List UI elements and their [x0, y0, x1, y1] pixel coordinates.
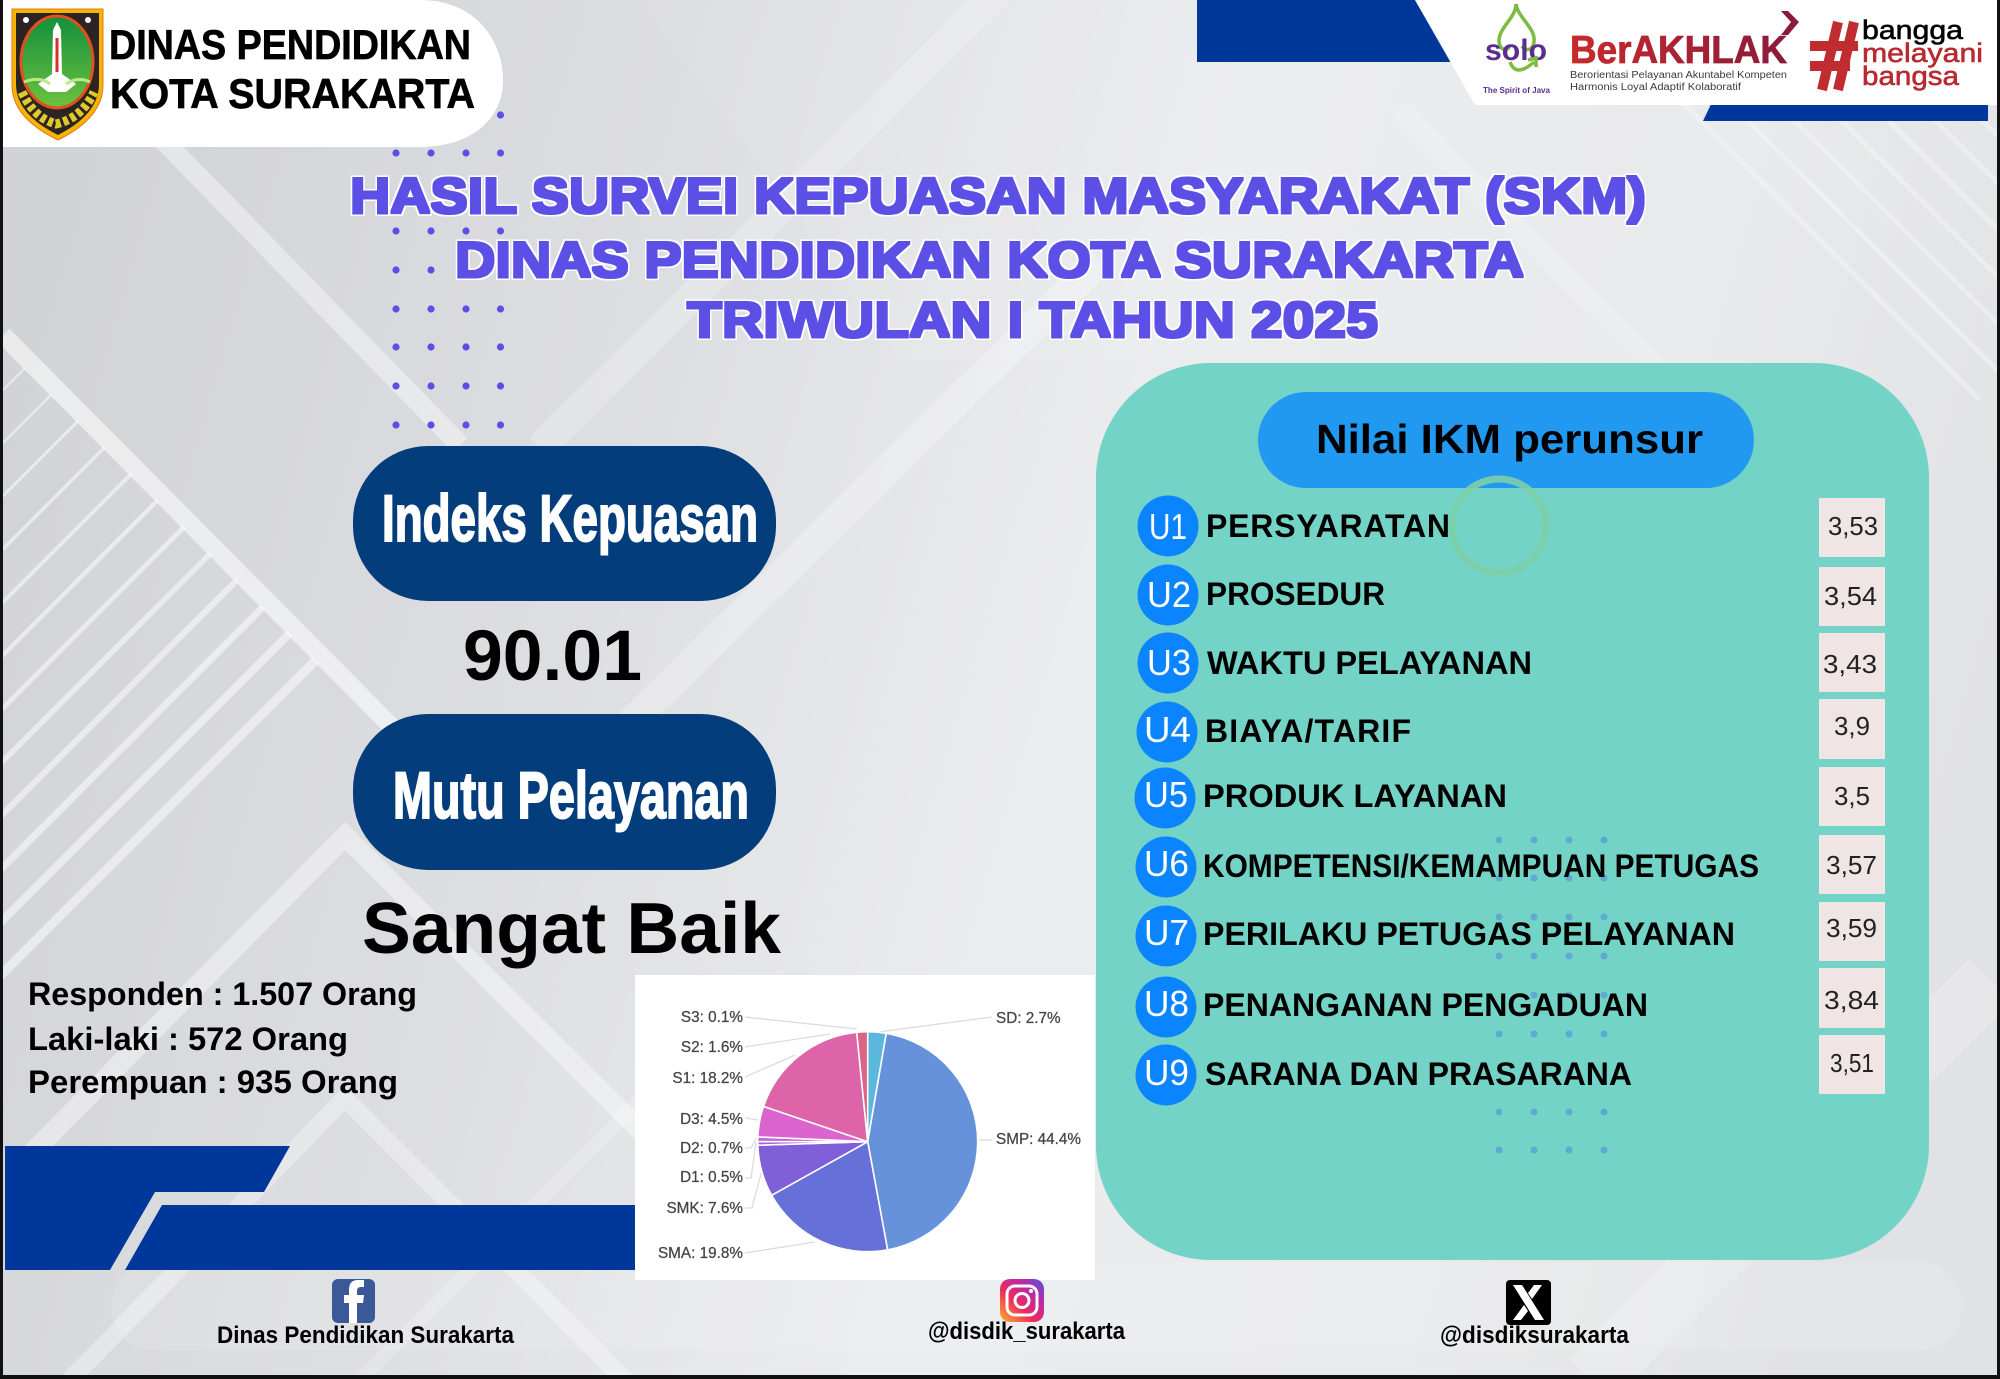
- icon: Solo logo: [1483, 4, 1551, 95]
- row U2: [1138, 564, 1885, 626]
- row U1: U1: [1149, 506, 1187, 547]
- pie slices: [758, 1032, 978, 1252]
- row U5: PRODUK LAYANAN: [1203, 778, 1507, 814]
- logo: BerAKHLAK: BerAKHLAK: [1570, 29, 1787, 72]
- pill: Mutu Pelayanan: Mutu Pelayanan: [393, 758, 749, 832]
- row U3: U3: [1147, 642, 1191, 683]
- logo: BerAKHLAK: Harmonis Loyal Adaptif Kolaboratif: [1570, 82, 1741, 93]
- row U8: 3,84: [1824, 985, 1879, 1015]
- row U8: U8: [1144, 983, 1189, 1024]
- row U4: U4: [1144, 709, 1191, 750]
- row U6: 3,57: [1826, 850, 1877, 880]
- pie labels: S3: 0.1%: [681, 1009, 743, 1026]
- row U7: U7: [1144, 912, 1189, 953]
- pie labels: D1: 0.5%: [680, 1169, 743, 1186]
- pie labels: SD: 2.7%: [996, 1010, 1061, 1027]
- footer: Facebook: Dinas Pendidikan Surakarta: [217, 1322, 515, 1349]
- footer pill: [112, 1262, 1962, 1350]
- header title: KOTA SURAKARTA: [110, 70, 475, 117]
- row U6: [1136, 835, 1885, 898]
- slogan: melayani: [1862, 38, 1983, 68]
- row U2: PROSEDUR: [1206, 576, 1385, 612]
- respondent stats: Responden : 1.507 Orang: [28, 976, 417, 1012]
- row U1: [1138, 496, 1885, 557]
- row U5: [1134, 767, 1885, 828]
- slogan: bangsa: [1862, 61, 1960, 91]
- title: [350, 168, 1646, 348]
- pie labels: SMK: 7.6%: [666, 1200, 743, 1217]
- logo: BerAKHLAK: Berorientasi Pelayanan Akuntabel Kompeten: [1570, 70, 1787, 81]
- icon: city crest: [12, 9, 103, 140]
- pill: Indeks Kepuasan: Indeks Kepuasan: [382, 481, 758, 555]
- pie labels: SMP: 44.4%: [996, 1131, 1081, 1148]
- header panel: organisation: [3, 0, 503, 147]
- row U6: U6: [1144, 843, 1189, 884]
- row U4: [1136, 699, 1885, 762]
- row U9: SARANA DAN PRASARANA: [1205, 1056, 1632, 1092]
- row U2: U2: [1147, 574, 1191, 615]
- dot pattern: panel: [1496, 836, 1608, 1154]
- footer: X: @disdiksurakarta: [1440, 1322, 1630, 1349]
- row U3: WAKTU PELAYANAN: [1207, 645, 1532, 681]
- row U5: 3,5: [1834, 781, 1870, 811]
- icon: X: [1506, 1280, 1551, 1325]
- logo: BerAKHLAK: [1570, 11, 1799, 93]
- row U1: 3,53: [1828, 511, 1878, 541]
- row U4: BIAYA/TARIF: [1205, 713, 1411, 749]
- row U8: PENANGANAN PENGADUAN: [1203, 987, 1648, 1023]
- row U2: 3,54: [1824, 581, 1877, 611]
- panel: Nilai IKM perunsur: [1096, 363, 1929, 1260]
- row U9: U9: [1144, 1052, 1189, 1093]
- pie labels: S2: 1.6%: [681, 1039, 743, 1056]
- title: DINAS PENDIDIKAN KOTA SURAKARTA: [455, 232, 1524, 288]
- row U8: [1136, 968, 1885, 1038]
- top-right blue bar: [1197, 0, 1452, 62]
- slogan: [1862, 15, 1983, 91]
- logo panel: [1415, 0, 1997, 105]
- footer: Instagram: @disdik_surakarta: [928, 1318, 1126, 1345]
- row U7: [1136, 902, 1885, 966]
- decorative ring: [1452, 479, 1546, 573]
- panel heading: [1258, 392, 1754, 488]
- value: index score: 90.01: [463, 617, 642, 696]
- respondent stats: [28, 976, 417, 1100]
- row U3: [1138, 632, 1885, 694]
- icon: Solo logo: solo: [1485, 34, 1547, 67]
- row U7: 3,59: [1826, 913, 1877, 943]
- pie labels: D3: 4.5%: [680, 1111, 743, 1128]
- pill: Indeks Kepuasan: [353, 446, 776, 601]
- pie labels: D2: 0.7%: [680, 1140, 743, 1157]
- icon: Solo logo: The Spirit of Java: [1483, 86, 1551, 95]
- pill: Mutu Pelayanan: [353, 714, 776, 870]
- pie labels: [658, 1009, 1081, 1262]
- dot pattern: upper: [392, 111, 504, 429]
- top-right lower blue bar: [1703, 100, 1988, 121]
- row U1: PERSYARATAN: [1206, 508, 1450, 544]
- row U9: 3,51: [1830, 1048, 1874, 1078]
- bottom-left blue shapes: [5, 1146, 640, 1270]
- title: TRIWULAN I TAHUN 2025: [687, 292, 1378, 348]
- slogan: bangga: [1862, 15, 1964, 45]
- icon: hashtag: [1810, 22, 1858, 90]
- header title: DINAS PENDIDIKAN: [109, 21, 471, 68]
- row U4: 3,9: [1834, 711, 1870, 741]
- pie labels: SMA: 19.8%: [658, 1245, 743, 1262]
- row U6: KOMPETENSI/KEMAMPUAN PETUGAS: [1203, 848, 1759, 884]
- footer: Facebook: [217, 1279, 515, 1349]
- panel heading: Nilai IKM perunsur: [1316, 416, 1703, 462]
- icon: facebook: [332, 1279, 375, 1323]
- row U7: PERILAKU PETUGAS PELAYANAN: [1203, 916, 1735, 952]
- pie labels: S1: 18.2%: [672, 1070, 743, 1087]
- row U3: 3,43: [1823, 649, 1877, 679]
- pie chart: education level: [635, 975, 1095, 1280]
- footer: Instagram: [928, 1279, 1126, 1345]
- title: HASIL SURVEI KEPUASAN MASYARAKAT (SKM): [350, 168, 1646, 224]
- header title: [109, 21, 475, 117]
- leader lines: [745, 1017, 992, 1253]
- row U9: [1136, 1035, 1885, 1106]
- footer: X: [1440, 1280, 1630, 1349]
- respondent stats: Laki-laki : 572 Orang: [28, 1021, 348, 1057]
- icon: instagram: [1000, 1279, 1044, 1322]
- row U5: U5: [1144, 774, 1188, 815]
- value: service quality: Sangat Baik: [362, 889, 782, 969]
- respondent stats: Perempuan : 935 Orang: [28, 1064, 398, 1100]
